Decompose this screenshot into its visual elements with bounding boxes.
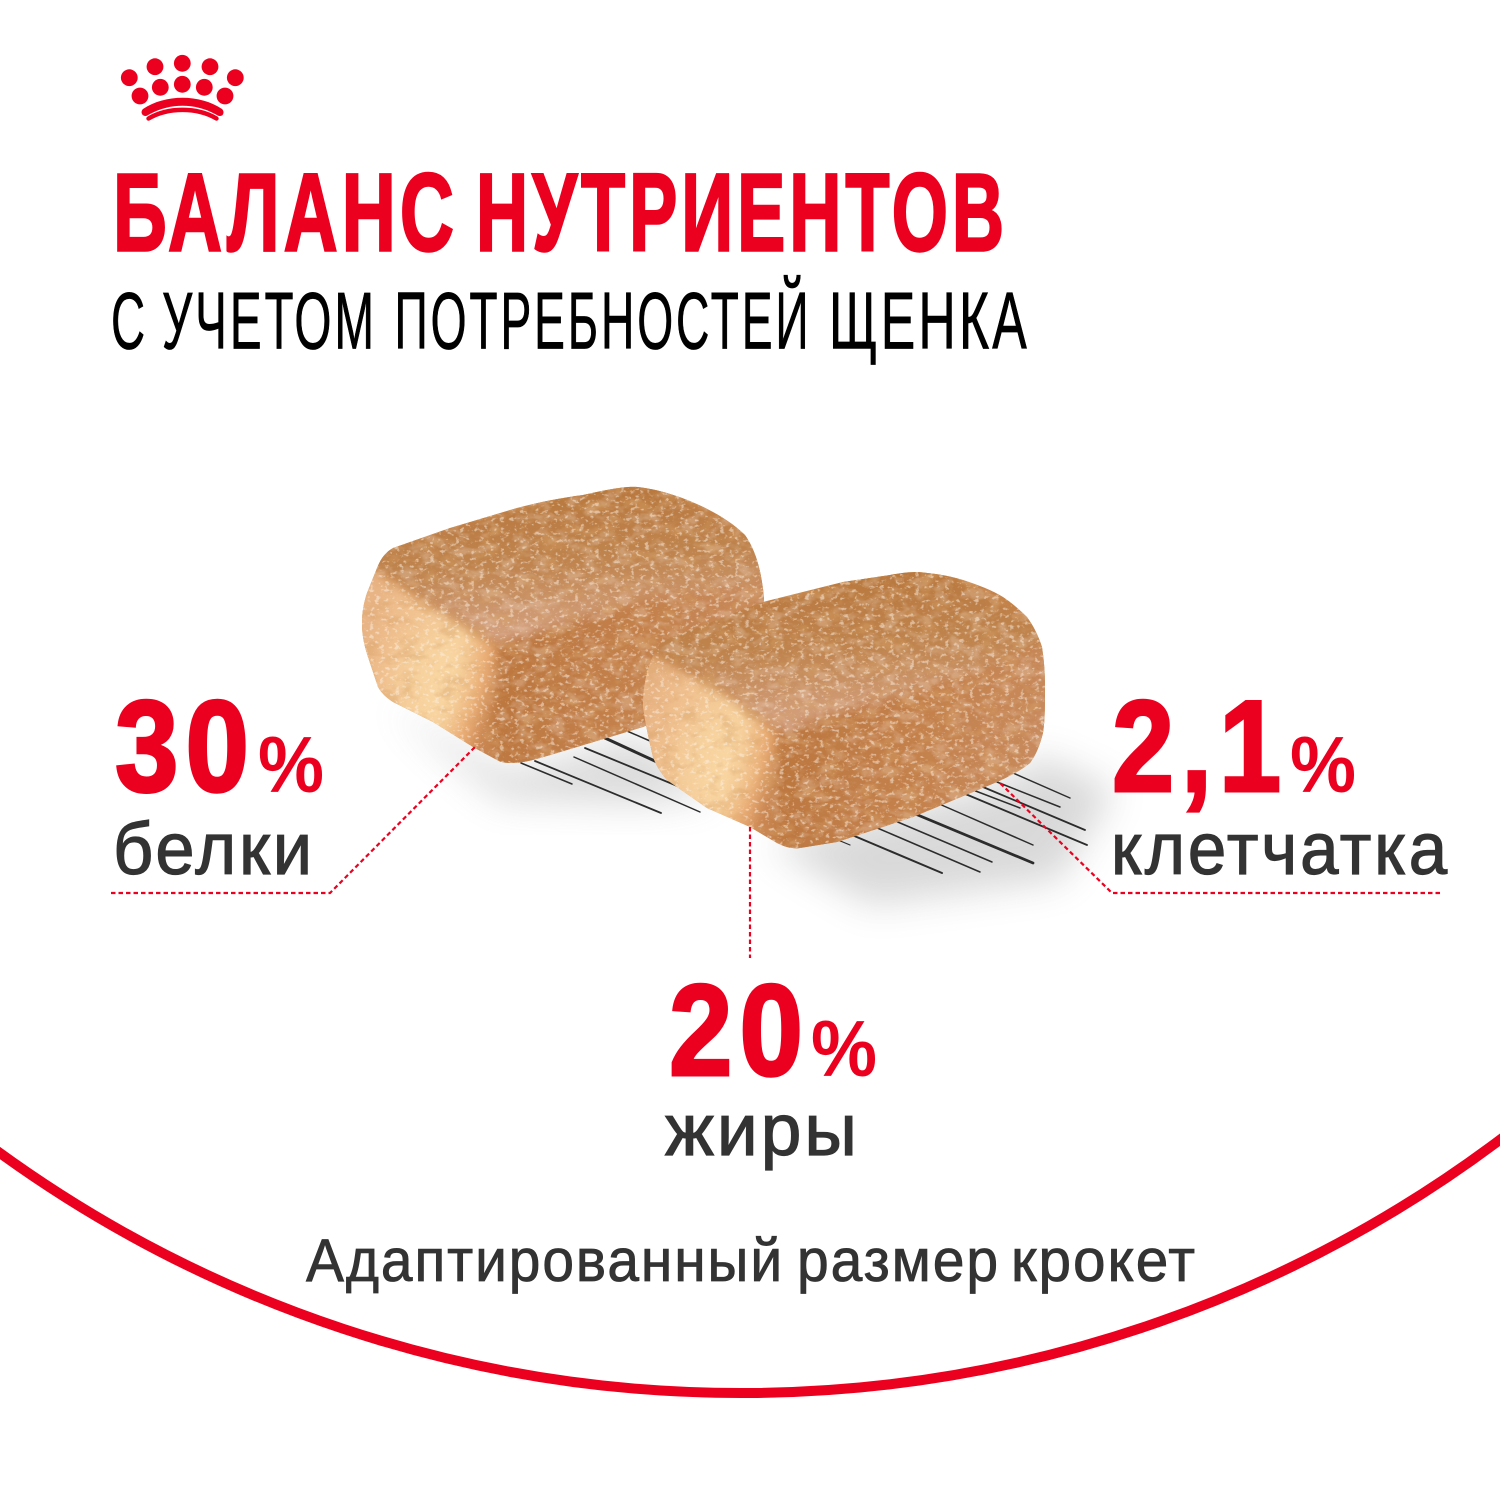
title: БАЛАНС <box>113 152 458 274</box>
stat: protein 30% <box>113 673 324 890</box>
title <box>113 152 1008 274</box>
red bottom arc <box>0 1135 1500 1393</box>
stat: fibre 2,1%: 2,1 <box>1112 673 1288 819</box>
caption <box>306 1227 1197 1294</box>
stat: protein 30%: белки <box>113 809 315 890</box>
callout line: fibre <box>1000 783 1440 893</box>
caption: Адаптированный <box>306 1227 784 1294</box>
callout line: fat <box>749 827 751 958</box>
stat: fibre 2,1%: клетчатка <box>1111 809 1450 890</box>
callout line: protein <box>111 747 475 893</box>
subtitle: ПОТРЕБНОСТЕЙ <box>394 274 812 366</box>
stat: fibre 2,1% <box>1111 673 1450 890</box>
kibble left <box>362 486 764 763</box>
stat: fat 20%: жиры <box>665 1090 860 1171</box>
kibble shadows <box>390 705 1115 905</box>
caption: крокет <box>1011 1227 1197 1294</box>
kibble illustration <box>340 470 1115 905</box>
stat: protein 30%: % <box>258 720 324 809</box>
stat: fat 20%: 20 <box>669 957 810 1103</box>
stat: fat 20%: % <box>811 1004 877 1093</box>
subtitle: ЩЕНКА <box>829 276 1030 366</box>
stat: fat 20% <box>665 957 877 1171</box>
caption: размер <box>797 1227 1000 1294</box>
subtitle: С <box>111 276 148 366</box>
kibble right <box>643 572 1045 848</box>
subtitle: УЧЕТОМ <box>162 276 377 366</box>
stat: protein 30%: 30 <box>115 673 256 819</box>
sketch lines under kibbles <box>521 731 1087 873</box>
icon: Royal Canin crown logo <box>121 55 244 118</box>
subtitle <box>111 274 1030 366</box>
stat: fibre 2,1%: % <box>1290 720 1356 809</box>
title: НУТРИЕНТОВ <box>476 152 1008 274</box>
